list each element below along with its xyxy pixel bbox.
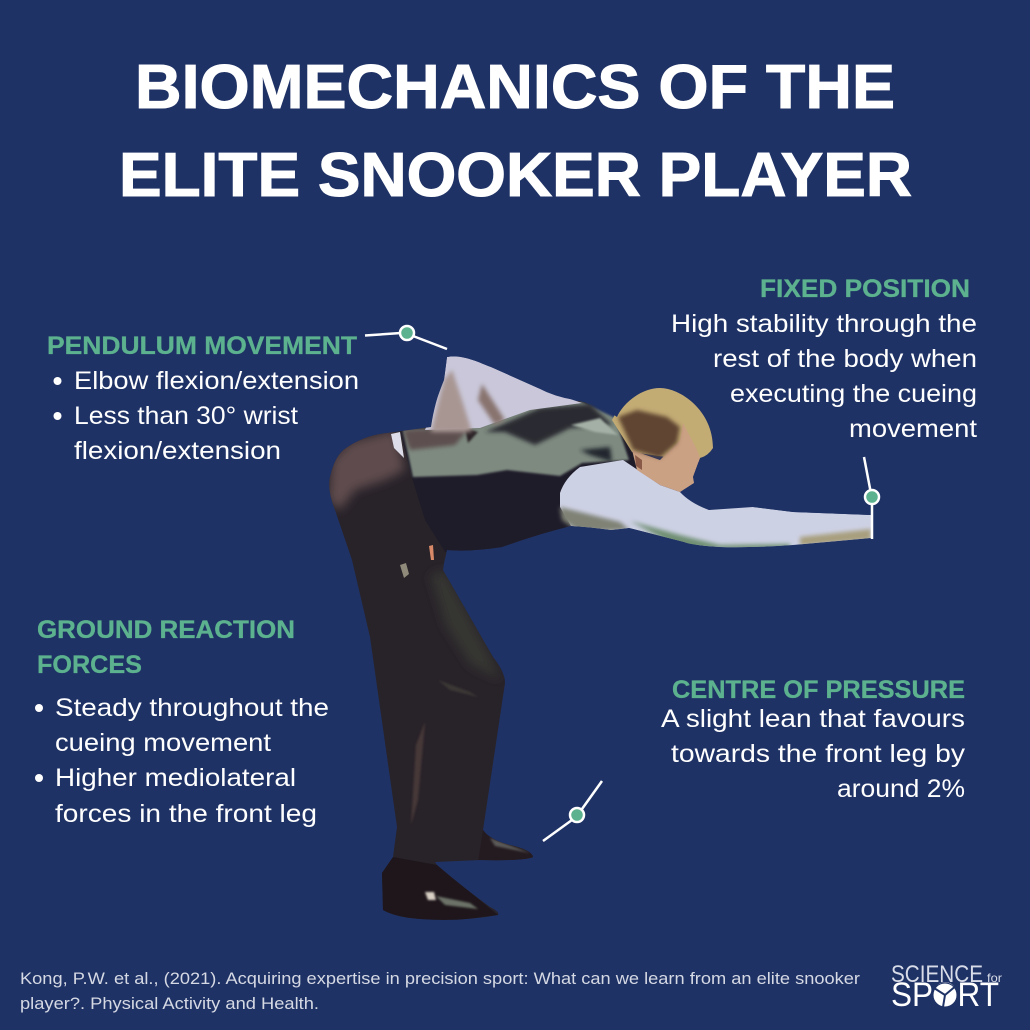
- text block: fixed position: executing the cueing: [730, 380, 977, 408]
- text block: centre of pressure: towards the front leg by: [671, 740, 966, 768]
- text block: fixed position: High stability through the: [671, 310, 977, 338]
- logo: science for sport: for: [987, 971, 1002, 985]
- heading: fixed position: FIXED POSITION: [760, 275, 970, 303]
- callout: centre of pressure: [661, 676, 966, 803]
- bridging arm shirt: [560, 460, 871, 552]
- text block: fixed position: [671, 310, 977, 443]
- citation: player?. Physical Activity and Health.: [20, 994, 319, 1013]
- title: BIOMECHANICS OF THE: [135, 53, 895, 122]
- bullet list: pendulum movement: Less than 30° wrist: [74, 402, 298, 430]
- callout: fixed position: [671, 275, 977, 443]
- head: [612, 385, 716, 492]
- text block: centre of pressure: [661, 705, 966, 803]
- bullet list: ground reaction forces: Higher mediolateral: [55, 764, 296, 792]
- marker: elbow pointer: [365, 326, 447, 349]
- heading: ground reaction forces: [37, 616, 295, 679]
- raised arm shirt: [425, 356, 582, 432]
- text block: centre of pressure: A slight lean that favours: [661, 705, 965, 733]
- bullet list: ground reaction forces: [35, 694, 329, 828]
- text block: fixed position: rest of the body when: [713, 345, 977, 373]
- icon: sport ball: [933, 983, 957, 1007]
- heading: ground reaction forces: GROUND REACTION: [37, 616, 295, 644]
- title: [119, 53, 912, 210]
- heading: centre of pressure: CENTRE OF PRESSURE: [672, 676, 965, 704]
- bullet list: pendulum movement: flexion/extension: [74, 437, 281, 465]
- marker: front foot pointer: [543, 781, 602, 841]
- waistcoat: [391, 400, 640, 560]
- bullet list: pendulum movement: Elbow flexion/extension: [74, 367, 359, 395]
- logo: science for sport: SCIENCE: [891, 961, 983, 988]
- callout: pendulum movement: [47, 332, 359, 465]
- heading: pendulum movement: PENDULUM MOVEMENT: [47, 332, 357, 360]
- citation: [20, 969, 860, 1013]
- logo: science for sport: [891, 961, 1002, 1014]
- bullet list: ground reaction forces: cueing movement: [55, 729, 271, 757]
- marker: bridge hand pointer: [864, 457, 879, 539]
- logo: science for sport: SPORT: [891, 976, 999, 1014]
- heading: ground reaction forces: FORCES: [37, 651, 142, 679]
- text block: fixed position: movement: [849, 415, 977, 443]
- bullet list: ground reaction forces: Steady throughout the: [55, 694, 329, 722]
- citation: Kong, P.W. et al., (2021). Acquiring expertise in precision sport: What can we learn from an elite snooker: [20, 969, 860, 988]
- bullet list: pendulum movement: [54, 367, 359, 465]
- shoes: [380, 830, 535, 925]
- snooker player figure: [320, 356, 871, 930]
- callout: ground reaction forces: [35, 616, 329, 828]
- title: ELITE SNOOKER PLAYER: [119, 141, 912, 210]
- trousers and legs: [320, 420, 540, 930]
- text block: centre of pressure: around 2%: [837, 775, 965, 803]
- bullet list: ground reaction forces: forces in the front leg: [55, 800, 317, 828]
